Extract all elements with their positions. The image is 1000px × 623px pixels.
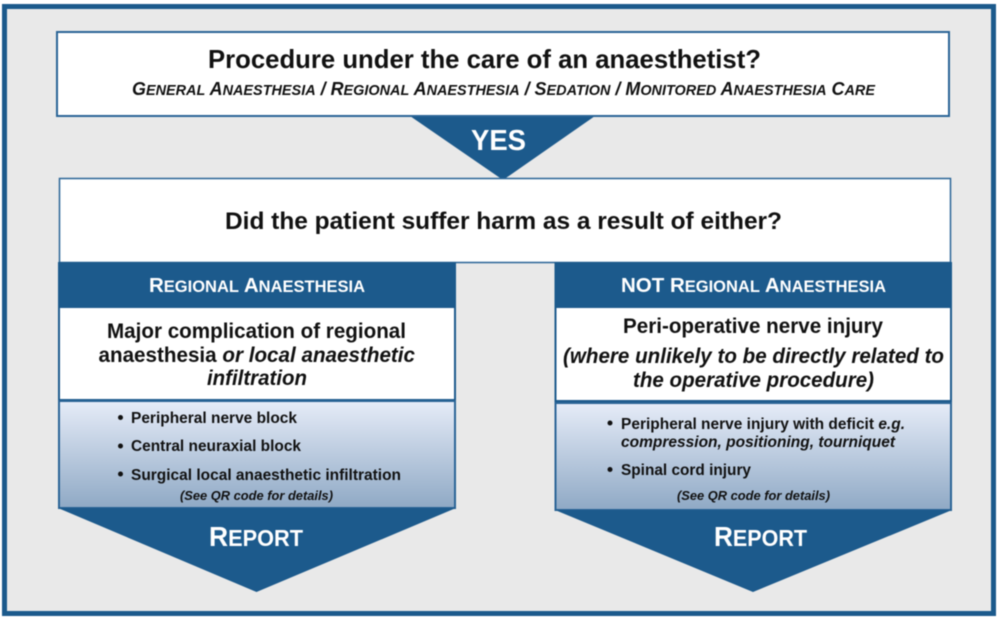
panel: harm question	[60, 178, 950, 262]
header: regional anaesthesia: REGIONAL ANAESTHESIA	[149, 274, 365, 297]
list: non-regional criteria: compression, positioning, tourniquet	[621, 434, 896, 451]
panel: harm question: Did the patient suffer harm as a result of either?	[225, 208, 782, 235]
panel: regional anaesthesia	[58, 262, 456, 592]
text block: peri-operative nerve injury	[556, 307, 951, 401]
text block: major complication: infiltration	[207, 366, 307, 390]
header: not regional anaesthesia	[554, 262, 952, 308]
text block: major complication: Major complication of regional	[107, 319, 406, 343]
arrow: report	[58, 508, 456, 592]
text block: peri-operative nerve injury: Peri-operative nerve injury	[623, 314, 883, 338]
panel: procedure question	[57, 32, 949, 116]
panel: not regional anaesthesia	[554, 262, 952, 592]
list: non-regional criteria: Peripheral nerve injury with deficit e.g.	[621, 416, 905, 433]
text block: major complication	[59, 307, 455, 400]
list: non-regional criteria	[556, 403, 951, 510]
arrow: report	[555, 510, 952, 592]
list: non-regional criteria: Spinal cord injury	[621, 462, 751, 479]
header: regional anaesthesia	[58, 262, 456, 308]
arrow: YES: YES	[471, 125, 526, 157]
list: regional criteria	[59, 401, 455, 508]
list: regional criteria: Peripheral nerve block	[131, 410, 297, 427]
header: not regional anaesthesia: NOT REGIONAL ANAESTHESIA	[621, 274, 886, 297]
text block: peri-operative nerve injury: the operative procedure)	[633, 368, 874, 392]
list: regional criteria: (See QR code for details)	[180, 489, 333, 503]
arrow: YES	[410, 116, 595, 180]
list: non-regional criteria: (See QR code for details)	[677, 489, 830, 503]
list: regional criteria: Central neuraxial block	[131, 438, 301, 455]
heading: procedure question: Procedure under the care of an anaesthetist?	[208, 44, 761, 74]
text block: major complication: anaesthesia or local anaesthetic	[98, 343, 415, 367]
arrow: report: REPORT	[209, 521, 303, 552]
text block: peri-operative nerve injury: (where unlikely to be directly related to	[563, 344, 944, 368]
list: regional criteria: Surgical local anaesthetic infiltration	[131, 467, 401, 484]
arrow: report: REPORT	[714, 521, 807, 552]
subheading: anaesthesia types: GENERAL ANAESTHESIA / REGIONAL ANAESTHESIA / SEDATION / MONITORED ANAESTHESIA CARE	[132, 79, 876, 99]
